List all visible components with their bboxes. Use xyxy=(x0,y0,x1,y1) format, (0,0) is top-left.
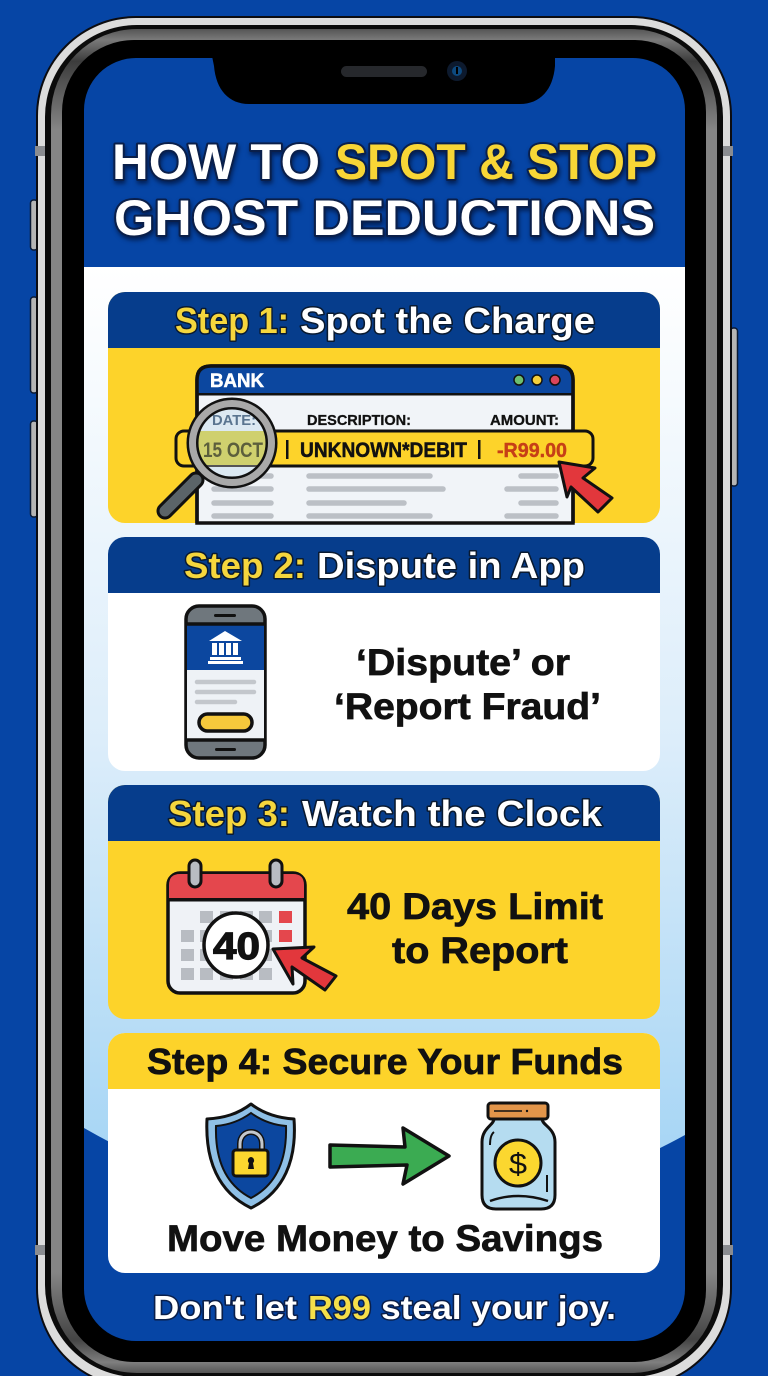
icon: shield with padlock xyxy=(207,1104,294,1208)
arrow: red pointer to 40 xyxy=(273,947,336,990)
speaker xyxy=(341,66,427,77)
heading: step 3 xyxy=(168,793,603,834)
heading: step 2: Step 2: xyxy=(184,545,306,586)
panel: step 1 xyxy=(108,292,660,523)
icon: magnifying glass: 15 OCT xyxy=(203,439,263,462)
text: dispute or report fraud xyxy=(334,642,601,727)
icon: calendar 40 days xyxy=(168,860,336,993)
text: move money to savings: Move Money to Savings xyxy=(167,1218,603,1259)
side buttons xyxy=(30,200,738,517)
bank statement window xyxy=(197,366,573,523)
text: 40 days limit: to Report xyxy=(392,930,568,971)
title: SPOT & STOP xyxy=(335,134,657,190)
footer tagline: R99 xyxy=(308,1289,371,1326)
icon: magnifying glass xyxy=(165,400,280,511)
panel: step 3 xyxy=(108,785,660,1019)
icon: savings jar: $ xyxy=(509,1148,527,1181)
highlighted transaction: 15 OCT xyxy=(203,439,263,462)
heading: step 3: Watch the Clock xyxy=(302,793,603,834)
footer tagline: Don't let xyxy=(153,1289,297,1326)
footer tagline: steal your joy. xyxy=(381,1289,616,1326)
text: 40 days limit: 40 Days Limit xyxy=(347,886,603,927)
light content background xyxy=(84,267,685,1216)
heading: step 2 xyxy=(184,545,585,586)
heading: step 2: Dispute in App xyxy=(317,545,585,586)
heading: step 1: Step 1: xyxy=(175,300,289,341)
bank statement window: BANK xyxy=(210,371,264,392)
highlighted transaction: UNKNOWN*DEBIT xyxy=(300,439,467,462)
icon: magnifying glass: DATE: xyxy=(212,412,256,429)
highlighted transaction: -R99.00 xyxy=(497,440,567,462)
camera xyxy=(447,61,467,81)
icon: calendar 40 days: 40 xyxy=(213,926,260,968)
heading: step 3: Step 3: xyxy=(168,793,290,834)
icon: phone with bank app xyxy=(186,606,265,758)
text: dispute or report fraud: ‘Report Fraud’ xyxy=(334,686,601,727)
text: dispute or report fraud: ‘Dispute’ or xyxy=(356,642,570,683)
arrow: red pointer to amount xyxy=(559,462,612,512)
panel: step 4 xyxy=(108,1033,660,1273)
heading: step 1 xyxy=(175,300,595,341)
antenna bands xyxy=(35,146,733,1255)
notch xyxy=(212,56,555,104)
panel: step 2 xyxy=(108,537,660,771)
bank statement window: DESCRIPTION: xyxy=(307,412,411,429)
heading: step 1: Spot the Charge xyxy=(300,300,595,341)
footer tagline xyxy=(153,1289,616,1326)
highlighted transaction xyxy=(176,431,593,466)
bank statement window: AMOUNT: xyxy=(490,412,559,429)
title: GHOST DEDUCTIONS xyxy=(114,190,655,246)
title xyxy=(112,134,657,246)
arrow: green xyxy=(330,1128,449,1184)
screen xyxy=(84,58,685,1341)
heading: step 4: Step 4: Secure Your Funds xyxy=(147,1041,623,1082)
text: 40 days limit xyxy=(347,886,603,971)
title: HOW TO xyxy=(112,134,320,190)
icon: savings jar xyxy=(482,1103,555,1209)
bank statement window: DATE: xyxy=(212,412,256,429)
